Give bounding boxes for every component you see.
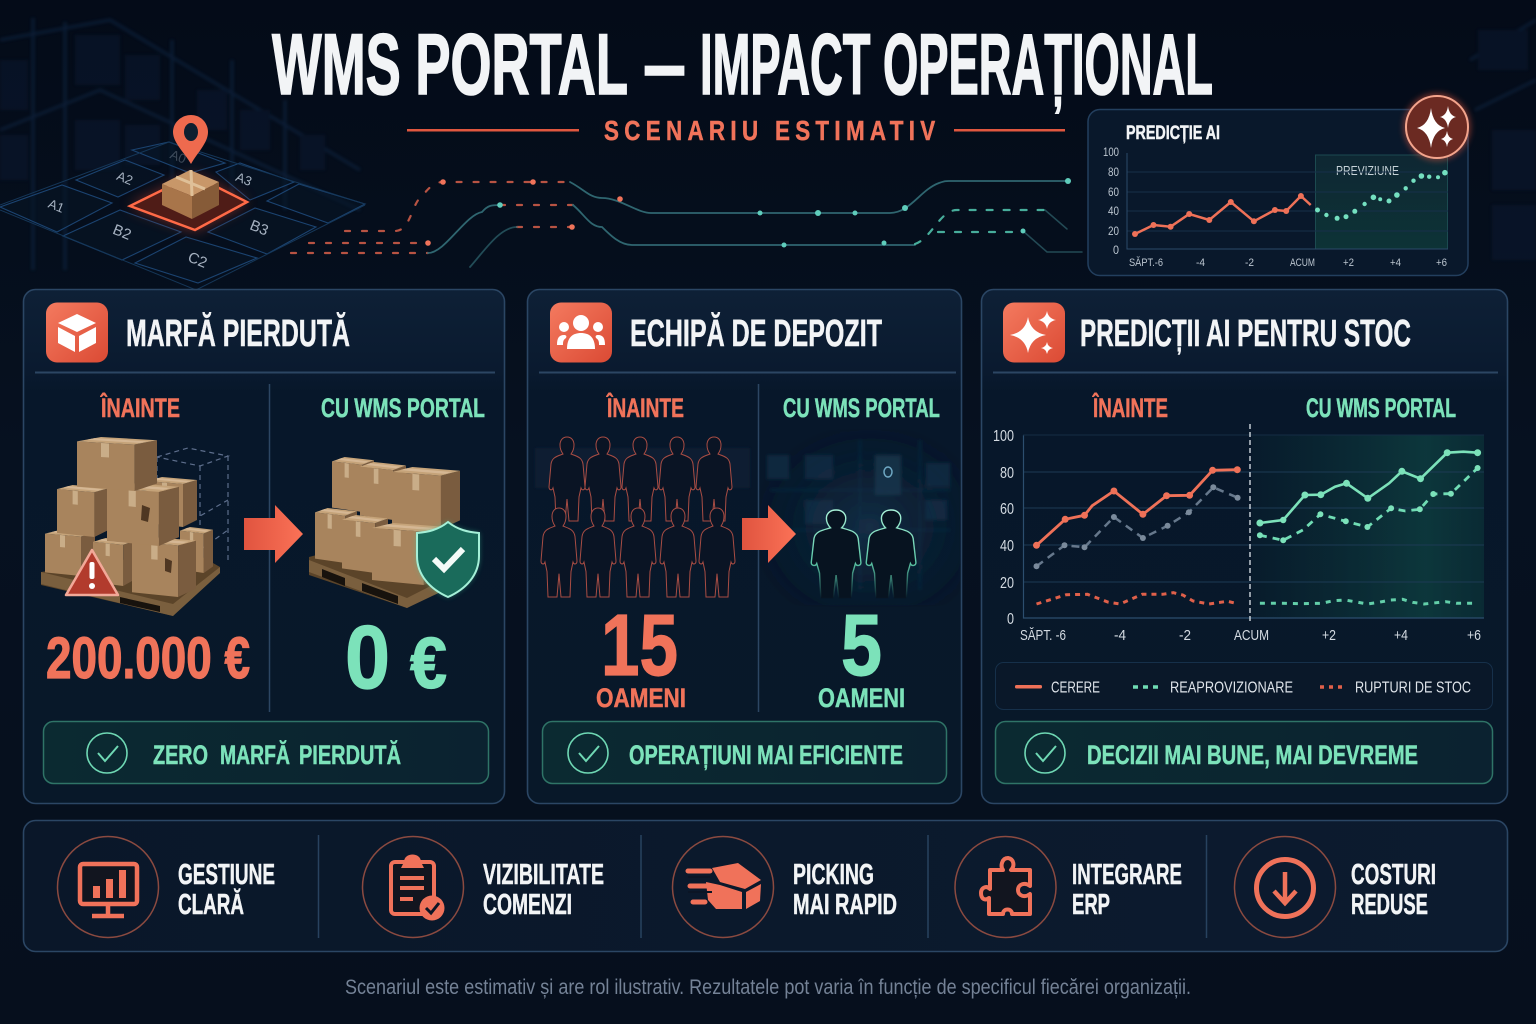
- isometric warehouse floor map with pin and box: A2: [115, 168, 135, 188]
- mini chart axes: +2: [1343, 257, 1354, 269]
- mini chart axes: -4: [1196, 257, 1205, 269]
- benefit: clear management: [58, 836, 275, 938]
- benefit: ERP integration: ERP: [1072, 889, 1110, 921]
- icon: warning triangle: [66, 550, 118, 595]
- after label: CU WMS PORTAL: [321, 393, 485, 423]
- x axis labels: +6: [1467, 627, 1481, 644]
- silhouettes: fifteen workers before: [541, 437, 735, 597]
- panel: AI stock predictions: [982, 290, 1508, 804]
- outcome banner: OPERAȚIUNI MAI EFICIENTE: [629, 740, 903, 770]
- forecast area: PREVIZIUNE: [1336, 163, 1399, 178]
- panel: warehouse team: [528, 290, 962, 804]
- line chart: [993, 424, 1484, 644]
- mini chart axes: +4: [1390, 257, 1401, 269]
- benefit: clear management: CLARĂ: [178, 888, 244, 921]
- y axis labels: 60: [1000, 501, 1014, 518]
- mini chart forecast line: [1315, 170, 1448, 221]
- title: —: [645, 17, 684, 113]
- benefit: faster picking: MAI RAPID: [793, 889, 897, 921]
- legend: [996, 662, 1492, 710]
- outcome banner: DECIZII MAI BUNE, MAI DEVREME: [1087, 740, 1418, 770]
- value before: 15: [601, 597, 678, 694]
- forecast area: [1316, 155, 1448, 249]
- before label: ÎNAINTE: [1092, 392, 1168, 423]
- legend: RUPTURI DE STOC: [1355, 680, 1471, 696]
- footer note: Scenariul este estimativ și are rol ilustrativ. Rezultatele pot varia în funcție de specificul fiecărei organizații.: [345, 976, 1191, 999]
- panel: lost goods: [24, 290, 504, 804]
- benefit: order visibility: VIZIBILITATE: [483, 859, 604, 891]
- y axis labels: 40: [1000, 538, 1014, 555]
- unit after: OAMENI: [818, 683, 905, 713]
- icon: sparkles: [1003, 302, 1065, 362]
- isometric warehouse floor map with pin and box: A0: [168, 147, 188, 166]
- mini chart axes: +6: [1436, 257, 1447, 269]
- value after: [345, 608, 447, 708]
- y axis labels: 100: [993, 428, 1014, 445]
- mini chart axes: 80: [1108, 165, 1119, 179]
- series: replenishment after: [1257, 465, 1481, 543]
- x axis labels: +2: [1322, 627, 1336, 644]
- arrow: [742, 505, 796, 563]
- panel heading: ECHIPĂ DE DEPOZIT: [630, 311, 882, 355]
- unit before: OAMENI: [596, 683, 686, 713]
- y axis labels: [993, 428, 1014, 628]
- x axis labels: ACUM: [1234, 627, 1269, 644]
- benefit: reduced costs: REDUSE: [1351, 889, 1428, 921]
- outcome banner: [44, 722, 488, 784]
- benefit: faster picking: PICKING: [793, 859, 874, 891]
- silhouettes: five workers after: [811, 510, 916, 598]
- title: [272, 17, 1213, 113]
- y axis labels: 80: [1000, 465, 1014, 482]
- isometric warehouse floor map with pin and box: C2: [185, 249, 210, 272]
- series: demand before: [1033, 466, 1241, 549]
- data flow lines: [291, 178, 1082, 267]
- benefit: faster picking: [672, 836, 897, 938]
- warehouse background right: [1470, 20, 1536, 260]
- outcome banner: ZERO: [153, 740, 208, 770]
- before label: ÎNAINTE: [100, 392, 180, 423]
- mini chart axes: 60: [1108, 185, 1119, 199]
- outcome banner: MARFĂ: [220, 739, 290, 770]
- outcome banner: [542, 722, 946, 784]
- series: stockouts before: [1036, 593, 1238, 604]
- mini chart axes: -2: [1245, 257, 1254, 269]
- isometric warehouse floor map with pin and box: A3: [234, 169, 254, 189]
- benefit: clear management: GESTIUNE: [178, 859, 275, 891]
- benefit: order visibility: COMENZI: [483, 889, 572, 921]
- icon: AI sparkle badge: [1403, 93, 1471, 161]
- benefit: order visibility: [362, 836, 604, 938]
- isometric warehouse floor map with pin and box: [0, 115, 365, 290]
- x axis labels: +4: [1394, 627, 1408, 644]
- value after: 0: [345, 608, 390, 708]
- series: demand after: [1256, 449, 1481, 526]
- y axis labels: 20: [1000, 575, 1014, 592]
- mini chart heading: PREDICȚIE AI: [1126, 123, 1220, 144]
- before label: ÎNAINTE: [606, 392, 684, 423]
- title: WMS PORTAL: [272, 17, 628, 113]
- outcome banner: [996, 722, 1492, 784]
- value after: €: [410, 624, 447, 704]
- mini chart axes: [1103, 145, 1448, 269]
- panel: benefits strip: [24, 820, 1508, 952]
- legend: REAPROVIZIONARE: [1170, 680, 1293, 696]
- outcome banner: PIERDUTĂ: [299, 739, 401, 770]
- benefit: ERP integration: INTEGRARE: [1072, 859, 1182, 891]
- intact box stack on pallet: [309, 457, 470, 608]
- warehouse background left: [0, 18, 360, 270]
- icon: cube: [46, 302, 108, 362]
- mini chart axes: 40: [1108, 204, 1119, 218]
- value before: 200.000 €: [46, 626, 250, 691]
- series: replenishment before: [1034, 484, 1241, 569]
- panel: AI prediction mini chart: [1088, 93, 1471, 276]
- benefit: reduced costs: COSTURI: [1351, 859, 1436, 891]
- icon: shield check: [417, 522, 479, 597]
- isometric warehouse floor map with pin and box: A1: [46, 196, 66, 216]
- x axis labels: SĂPT. -6: [1020, 627, 1066, 644]
- series: stockouts after: [1260, 599, 1478, 604]
- warehouse shelves background: [535, 430, 960, 605]
- mini chart axes: 100: [1103, 145, 1119, 159]
- arrow: [244, 505, 303, 563]
- mini chart axes: SĂPT.-6: [1129, 256, 1163, 269]
- x axis labels: -2: [1179, 627, 1191, 644]
- after label: CU WMS PORTAL: [1306, 393, 1456, 423]
- icon: team: [550, 302, 612, 362]
- y axis labels: 0: [1007, 611, 1014, 628]
- mini chart axes: 20: [1108, 224, 1119, 238]
- mini chart history line: [1132, 193, 1311, 237]
- damaged box stack on pallet: [41, 437, 228, 616]
- legend: CERERE: [1051, 680, 1100, 696]
- mini chart axes: 0: [1113, 243, 1119, 257]
- value after: 5: [841, 597, 882, 694]
- x axis labels: [1020, 627, 1481, 644]
- panel heading: MARFĂ PIERDUTĂ: [126, 311, 350, 355]
- isometric warehouse floor map with pin and box: B2: [110, 221, 134, 244]
- mini chart axes: ACUM: [1290, 257, 1315, 269]
- subtitle: SCENARIU ESTIMATIV: [604, 116, 935, 147]
- isometric warehouse floor map with pin and box: B3: [247, 217, 271, 239]
- benefit: ERP integration: [955, 836, 1182, 938]
- x axis labels: -4: [1114, 627, 1126, 644]
- benefit: reduced costs: [1234, 836, 1436, 938]
- after label: CU WMS PORTAL: [783, 393, 940, 423]
